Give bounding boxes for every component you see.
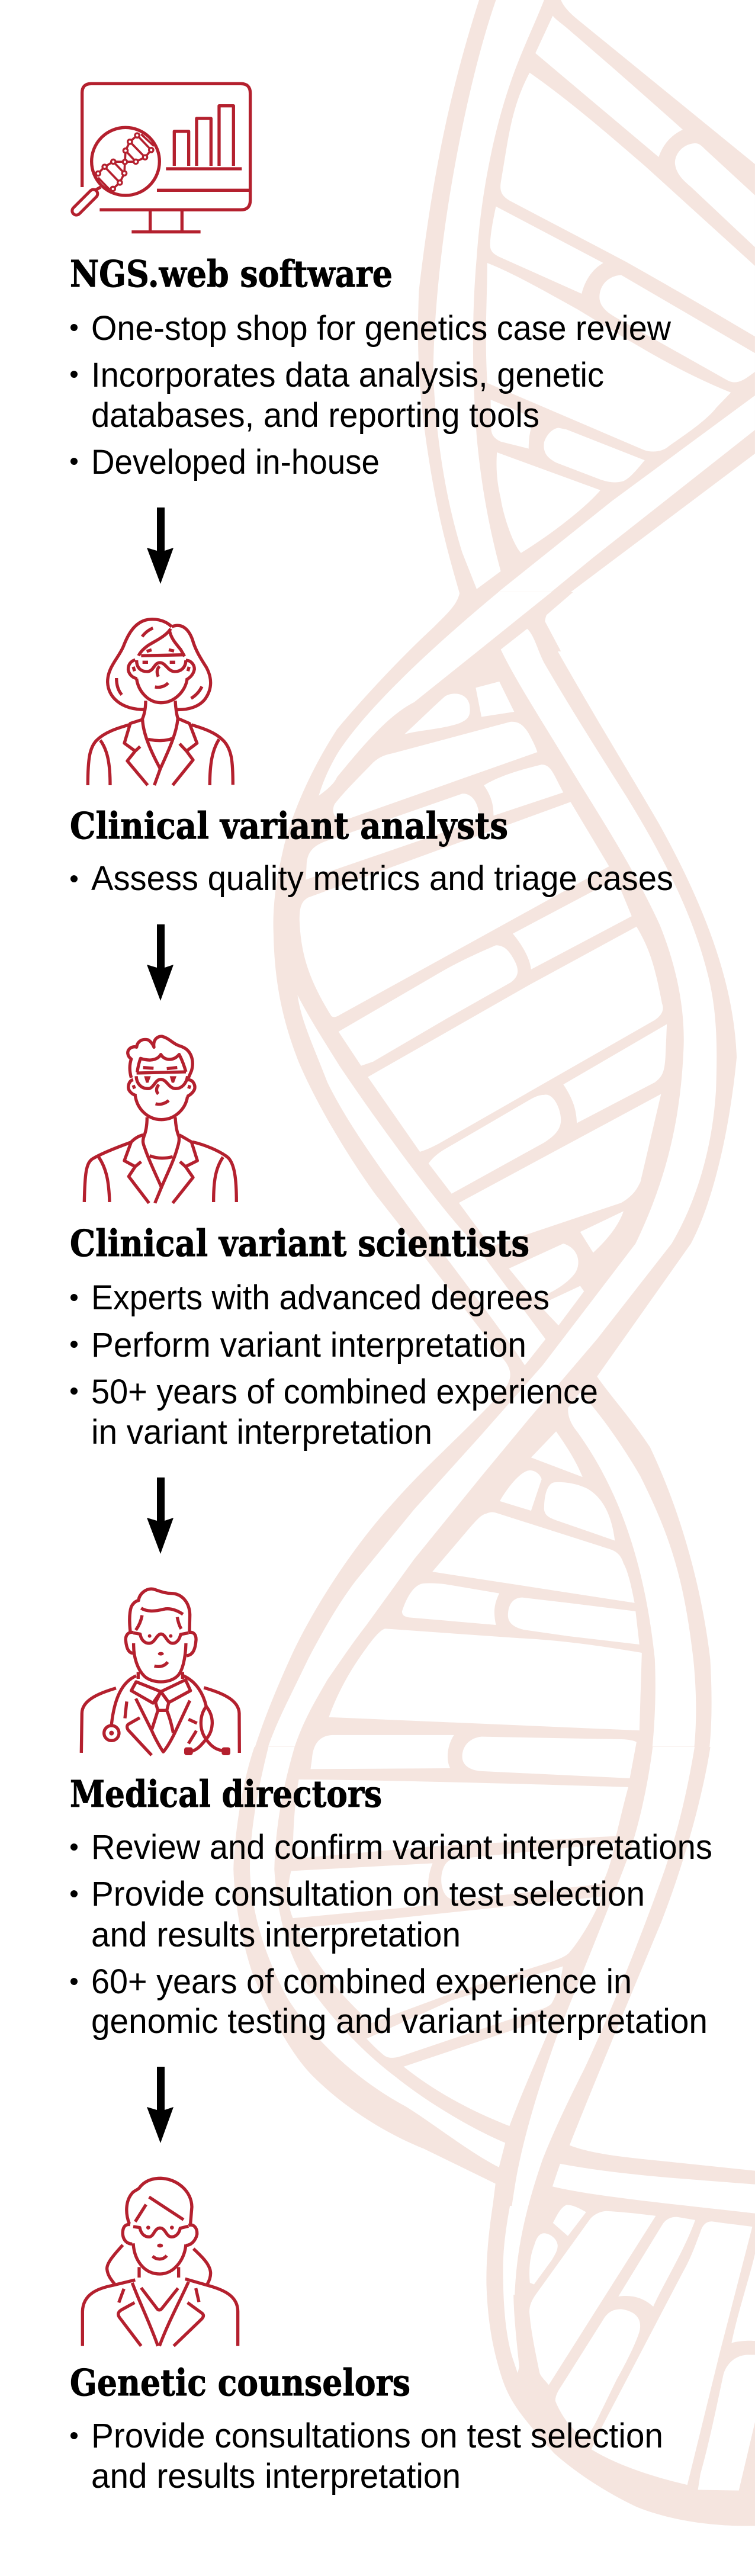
text block: directors bullets: 60+ years of combined experience in (91, 1962, 632, 2001)
heading: Clinical variant scientists: Clinical variant scientists (70, 1222, 529, 1265)
text block: counselors bullet: and results interpretation (91, 2457, 461, 2495)
text block: directors bullets: and results interpretation (91, 1916, 461, 1954)
icon: clinical variant scientist (84, 1036, 236, 1203)
text block: scientists bullets (70, 1279, 598, 1451)
text block: NGS.web software bullets: Developed in-house (91, 443, 380, 481)
text block: scientists bullets: Experts with advanced degrees (91, 1279, 550, 1317)
heading: Medical directors: Medical directors (70, 1772, 382, 1816)
heading: Clinical variant analysts: Clinical variant analysts (70, 804, 508, 847)
arrow: directors to counselors (147, 2067, 174, 2143)
icon: clinical variant analyst (88, 619, 233, 785)
arrow: scientists to directors (147, 1477, 174, 1554)
text block: scientists bullets: Perform variant interpretation (91, 1326, 526, 1364)
icon: medical director with stethoscope (81, 1589, 239, 1755)
arrow: software to analysts (147, 508, 174, 584)
text block: directors bullets: Review and confirm variant interpretations (91, 1828, 712, 1867)
text block: counselors bullet (70, 2417, 663, 2495)
heading: Genetic counselors: Genetic counselors (70, 2361, 410, 2404)
text block: scientists bullets: 50+ years of combined experience (91, 1373, 598, 1411)
text block: NGS.web software bullets: One-stop shop for genetics case review (91, 309, 672, 348)
text block: NGS.web software bullets (70, 309, 672, 481)
text block: scientists bullets: in variant interpretation (91, 1413, 432, 1451)
text block: NGS.web software bullets: databases, and reporting tools (91, 396, 539, 435)
text block: analysts bullet: Assess quality metrics and triage cases (91, 859, 673, 898)
text block: counselors bullet: Provide consultations on test selection (91, 2417, 663, 2455)
heading: NGS.web software: NGS.web software (70, 252, 393, 295)
text block: NGS.web software bullets: Incorporates data analysis, genetic (91, 356, 604, 394)
text block: directors bullets: Provide consultation on test selection (91, 1875, 645, 1913)
arrow: analysts to scientists (147, 924, 174, 1001)
text block: directors bullets (70, 1828, 712, 2041)
background DNA helix watermark (233, 0, 755, 2526)
text block: directors bullets: genomic testing and variant interpretation (91, 2002, 708, 2041)
icon: monitor with magnified DNA and bar chart (76, 83, 250, 232)
icon: genetic counselor (82, 2178, 238, 2346)
